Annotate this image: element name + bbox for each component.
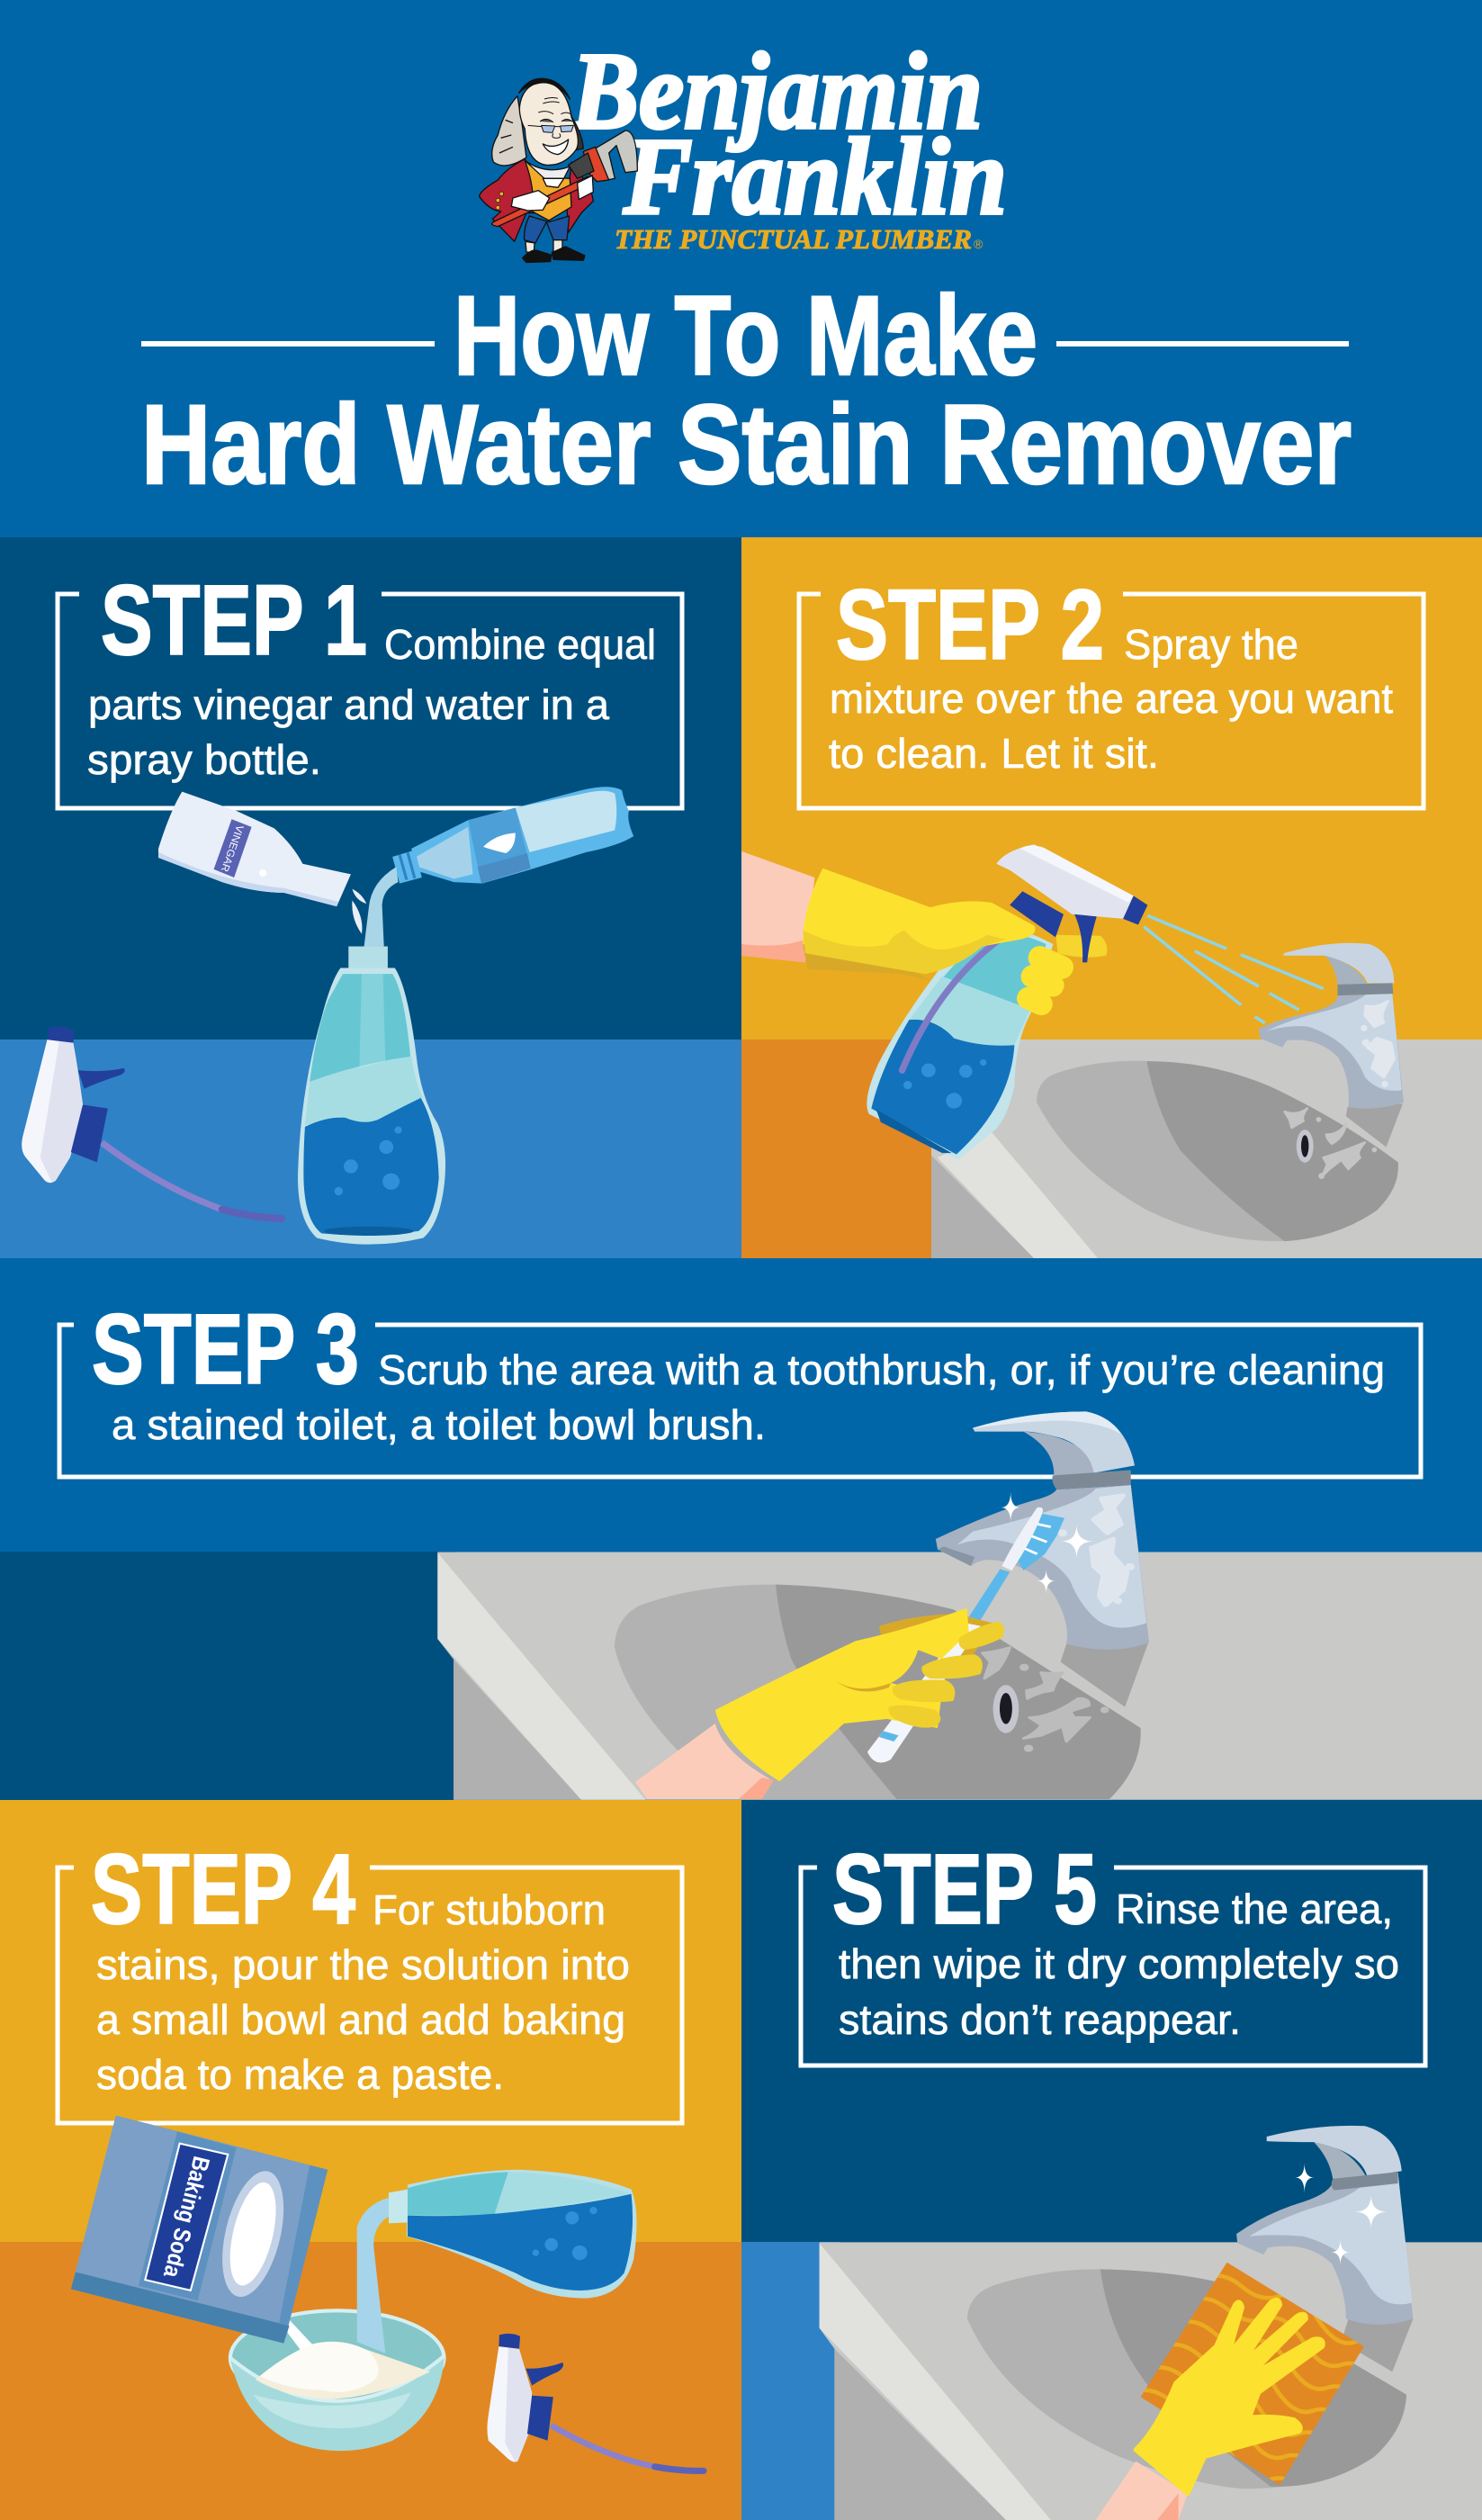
icon: vinegar bottle: [158, 792, 351, 906]
step 4 heading: STEP 4: [91, 1834, 355, 1945]
counter edge: [820, 2243, 1051, 2520]
logo: [480, 31, 1007, 263]
logo wordmark: Franklin: Franklin: [623, 116, 1007, 238]
step 3 instructions: a stained toilet, a toilet bowl brush.: [112, 1401, 766, 1448]
yellow rubber glove: [715, 1608, 1004, 1781]
title line one: How To Make: [454, 274, 1037, 399]
solution stream: [357, 2197, 391, 2354]
counter side: [931, 1156, 1034, 1258]
icon: spray head with tube: [488, 2334, 704, 2470]
step 3 heading: STEP 3: [92, 1294, 359, 1405]
counter side: [834, 2349, 1006, 2520]
counter top: [820, 2242, 1482, 2520]
sink basin: [615, 1585, 1141, 1799]
icon: orange cloth: [1141, 2263, 1364, 2486]
step 2 instructions: [829, 621, 1393, 777]
step 1 instructions: Combine equal: [384, 621, 656, 668]
step 2 instructions: Spray the: [1124, 621, 1298, 668]
counter top: [437, 1552, 1482, 1800]
panel: step 4: [0, 1800, 741, 2520]
step 4 instructions: For stubborn: [373, 1886, 606, 1933]
title rule right: [1056, 341, 1349, 346]
logo registered mark: ®: [974, 237, 984, 251]
sink basin: [967, 2269, 1406, 2488]
step 5 instructions: stains don’t reappear.: [839, 1996, 1241, 2043]
step 5 instructions: Rinse the area,: [1116, 1886, 1393, 1932]
icon: toothbrush: [867, 1508, 1064, 1762]
step 5 instructions: [839, 1886, 1399, 2043]
panel: step 5: [741, 1800, 1482, 2520]
icon: baking soda box: [71, 2116, 328, 2344]
step 2 instructions: to clean. Let it sit.: [829, 730, 1159, 777]
title rule left: [141, 341, 435, 346]
icon: open spray bottle: [298, 947, 445, 1245]
panel: step 3: [0, 1258, 1482, 1800]
panel: step 2: [741, 537, 1482, 1258]
step 5 instructions: then wipe it dry completely so: [839, 1940, 1399, 1987]
icon: tilted spray bottle: [389, 2170, 637, 2299]
step 4 instructions: soda to make a paste.: [96, 2051, 504, 2098]
icon: bowl: [230, 2310, 445, 2451]
illustration: step 4 mixing paste: [71, 2116, 704, 2470]
step 4 instructions: a small bowl and add baking: [96, 1996, 625, 2043]
faucet: [936, 1411, 1149, 1707]
panel: step 1: [0, 537, 741, 1258]
counter side: [454, 1660, 581, 1800]
arm: [1096, 2462, 1188, 2520]
icon: spray head with tube: [22, 1027, 282, 1219]
illustration: step 1 pouring: [22, 787, 633, 1245]
step 5 heading: STEP 5: [832, 1834, 1097, 1945]
icon: vinegar bottle: VINEGAR: [219, 824, 245, 873]
icon: spray head: [996, 844, 1147, 962]
step 3 text frame: [59, 1325, 1421, 1477]
illustration: step 2 spraying sink: [741, 844, 1404, 1258]
icon: water bottle: [392, 787, 633, 884]
step 2 text frame: [799, 594, 1424, 808]
icon: baking soda box: Baking Soda: [158, 2154, 214, 2281]
counter edge: [938, 1132, 1098, 1258]
water stream: [364, 867, 398, 947]
sparkles: [1295, 2163, 1388, 2265]
logo tagline: THE PUNCTUAL PLUMBER: [615, 223, 972, 255]
yellow rubber glove: [803, 868, 1077, 1019]
icon: Benjamin Franklin plumber mascot: [480, 78, 637, 263]
sink basin: [1037, 1061, 1398, 1241]
panel: header: [0, 0, 1482, 538]
logo wordmark: Benjamin: Benjamin: [570, 31, 983, 152]
step 4 instructions: stains, pour the solution into: [96, 1941, 630, 1988]
sparkles: [1001, 1491, 1093, 1595]
step 2 instructions: mixture over the area you want: [830, 675, 1393, 722]
faucet: [1236, 2126, 1413, 2372]
vinegar drops: [352, 889, 366, 934]
icon: spray bottle in hand: [867, 930, 1053, 1160]
yellow rubber glove: [1136, 2300, 1323, 2493]
baking soda paste: [256, 2319, 430, 2399]
step 1 heading: STEP 1: [101, 565, 367, 676]
title: [141, 274, 1352, 508]
glove behind toothbrush: [879, 1614, 992, 1683]
arm: [635, 1724, 774, 1799]
illustration: step 5 wiping sink: [820, 2126, 1482, 2520]
step 1 instructions: parts vinegar and water in a: [88, 681, 609, 728]
spray mist lines: [1144, 915, 1324, 1023]
step 2 heading: STEP 2: [836, 570, 1104, 680]
step 5 text frame: [801, 1868, 1425, 2066]
illustration: step 3 scrubbing: [615, 1411, 1149, 1799]
step 1 text frame: [58, 594, 682, 808]
step 1 instructions: [87, 621, 656, 783]
step 3 instructions: Scrub the area with a toothbrush, or, if you’re cleaning: [378, 1346, 1385, 1393]
counter edge: [437, 1552, 645, 1800]
faucet: [1259, 943, 1404, 1147]
step 1 instructions: spray bottle.: [87, 736, 321, 783]
arm: [741, 851, 814, 962]
step 3 instructions: [112, 1346, 1385, 1448]
step 4 instructions: [96, 1886, 630, 2098]
step 4 text frame: [58, 1868, 682, 2123]
illustration: step 3 counter: [437, 1552, 1482, 1800]
